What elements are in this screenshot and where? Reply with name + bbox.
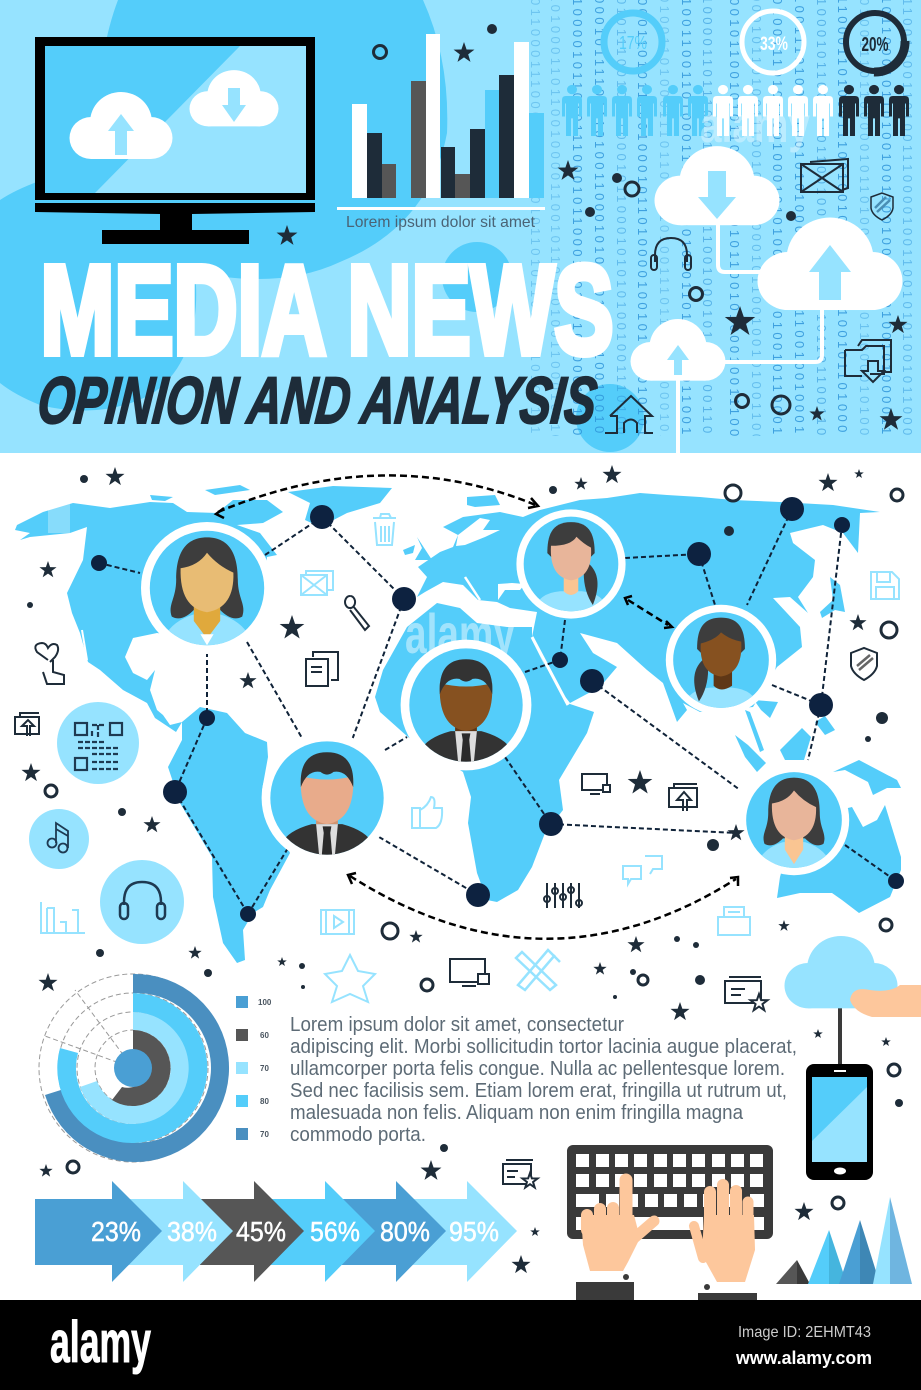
percentage arrows: 56% xyxy=(310,1216,360,1247)
gauge 20%: 20% xyxy=(862,34,889,56)
gauge 33% xyxy=(742,11,804,73)
icon: sheriff star xyxy=(325,955,375,1002)
binary code columns: 01100011100010110100101101011001001010011101 xyxy=(528,0,543,458)
binary code columns: 10110001011010010011001000011010010100001100 xyxy=(879,0,894,459)
binary code columns xyxy=(528,0,915,461)
binary code columns: 10011101000110010101000110010011001001000110 xyxy=(792,0,807,457)
network nodes xyxy=(91,497,904,922)
watermark: alamy xyxy=(405,602,515,665)
gauge 17% xyxy=(604,13,662,71)
icon: key xyxy=(345,596,369,630)
icon: folder upload left xyxy=(15,713,39,736)
icon: shield xyxy=(871,193,893,220)
icon: folder upload xyxy=(669,784,697,811)
icon: monitor lock xyxy=(582,774,610,794)
icon: sliders xyxy=(544,883,582,908)
binary code columns: 01001110110000010110100110101001100001010010 xyxy=(857,0,872,460)
watermark top: alamy xyxy=(700,97,810,153)
icon: hand heart xyxy=(35,643,64,684)
chart legend: 70 xyxy=(260,1064,269,1073)
percentage arrows: 38% xyxy=(167,1216,217,1247)
light line icons xyxy=(41,514,899,1002)
people pictogram row xyxy=(562,85,909,136)
cloud with cord and hand xyxy=(784,936,921,1065)
binary code columns: 11001000110100111000010011001010100101100010 xyxy=(900,0,915,460)
icon: house xyxy=(605,396,653,433)
icon: bar chart xyxy=(41,902,85,933)
body paragraph: Lorem ipsum dolor sit amet, consectetur xyxy=(290,1014,624,1036)
footer bar xyxy=(0,1300,921,1390)
gauge 17%: 17% xyxy=(619,33,647,53)
right hand xyxy=(694,1185,757,1300)
gauge 20% xyxy=(846,13,905,72)
binary code columns: 00010111100110100110001010010110101001001001 xyxy=(592,0,607,458)
icon: monitor lock lower xyxy=(450,959,489,986)
mountain triangles xyxy=(776,1197,912,1284)
body paragraph: adipiscing elit. Morbi sollicitudin tortor lacinia augue placerat, xyxy=(290,1036,797,1058)
music badge xyxy=(29,809,89,869)
icon: folder download xyxy=(845,340,891,382)
chart legend xyxy=(236,996,272,1140)
icon: mail xyxy=(801,159,848,192)
icon: video xyxy=(321,910,354,934)
body paragraph: Sed nec facilisis sem. Etiam lorem erat, fringilla ut rutrum ut, xyxy=(290,1080,787,1102)
binary code columns: 00101100101011000101001011001010001001110001 xyxy=(727,0,742,461)
avatar: woman north america xyxy=(141,522,273,654)
network connection lines xyxy=(99,509,896,914)
icon: folder xyxy=(718,907,750,935)
icon: chat xyxy=(623,856,662,884)
bar chart xyxy=(337,34,545,231)
binary code columns: 00010110100111001001110001011001001010011000 xyxy=(749,0,764,455)
icon: documents heart xyxy=(306,652,338,686)
map stars and dots xyxy=(22,465,903,1273)
binary code columns: 01001110101100100010101001110001001011000101 xyxy=(770,0,785,459)
avatar: woman australia xyxy=(746,772,850,876)
avatar: man africa xyxy=(401,640,531,770)
chart legend: 70 xyxy=(260,1130,269,1139)
curved double arrows xyxy=(216,475,738,939)
phone xyxy=(806,1064,873,1180)
icon: shield right xyxy=(851,648,877,680)
body paragraph: malesuada non felis. Aliquam non enim fringilla magna xyxy=(290,1102,744,1124)
binary code columns: 10001011001010110010011000010010110110011001 xyxy=(814,0,829,460)
icon: document star xyxy=(725,977,768,1010)
gauge 33%: 33% xyxy=(760,34,788,55)
title: MEDIA NEWS xyxy=(40,240,614,380)
body paragraph xyxy=(290,1014,797,1146)
binary code columns: 01001101000111011000010100111011000010001010 xyxy=(657,0,672,456)
avatar: woman asia xyxy=(666,605,776,715)
radial chart xyxy=(39,974,229,1162)
binary code columns: 10011001101000110010100101011011100101100100 xyxy=(679,0,694,459)
world map xyxy=(0,485,901,963)
icon: document star lower xyxy=(503,1160,538,1187)
top banner background xyxy=(0,0,921,453)
percentage arrows: 95% xyxy=(449,1216,499,1247)
footer bar: Image ID: 2EHMT43 xyxy=(738,1324,871,1341)
left hand xyxy=(576,1180,654,1300)
percentage arrows: 45% xyxy=(236,1216,286,1247)
footer bar: www.alamy.com xyxy=(735,1348,872,1368)
footer bar: alamy xyxy=(50,1310,151,1375)
avatar: man south america xyxy=(262,738,384,855)
binary code columns: 11000110100011100100101000101110010110100010 xyxy=(835,0,850,457)
binary code columns: 10100011011001000011001011010010011000101101 xyxy=(548,0,563,456)
avatar: woman europe xyxy=(516,509,626,619)
top banner stars and dots xyxy=(277,24,908,430)
dark line icons xyxy=(35,596,369,686)
subtitle: OPINION AND ANALYSIS xyxy=(34,364,600,438)
icon: headphones xyxy=(651,238,691,270)
chart legend: 80 xyxy=(260,1097,269,1106)
keyboard xyxy=(567,1145,773,1239)
QR code badge xyxy=(57,702,139,784)
binary code columns: 10000101101011100010110001001101010001011001 xyxy=(570,0,585,460)
icon: floppy xyxy=(871,572,899,599)
cloud network xyxy=(630,146,902,453)
percentage arrows xyxy=(35,1181,517,1282)
icon: thumb up xyxy=(412,797,442,828)
icon: trash xyxy=(373,514,396,545)
icon: tools xyxy=(516,950,560,990)
chart legend: 100 xyxy=(258,998,272,1007)
binary code columns: 01011100100110001011000101010100100111010011 xyxy=(614,0,629,458)
body paragraph: commodo porta. xyxy=(290,1124,426,1146)
body paragraph: ullamcorper porta felis congue. Nulla ac pellentesque lorem. xyxy=(290,1058,785,1080)
icon: mail xyxy=(301,571,333,595)
headphones badge xyxy=(100,860,184,944)
binary code columns: 10000110111000100110101100100010100010011010 xyxy=(700,0,715,458)
percentage arrows: 23% xyxy=(91,1216,141,1247)
percentage arrows: 80% xyxy=(380,1216,430,1247)
chart legend: 60 xyxy=(260,1031,269,1040)
binary code columns: 00011010111001000101101000010010101101010100 xyxy=(635,0,650,461)
bar chart: Lorem ipsum dolor sit amet xyxy=(346,214,536,231)
monitor with clouds xyxy=(35,37,315,244)
